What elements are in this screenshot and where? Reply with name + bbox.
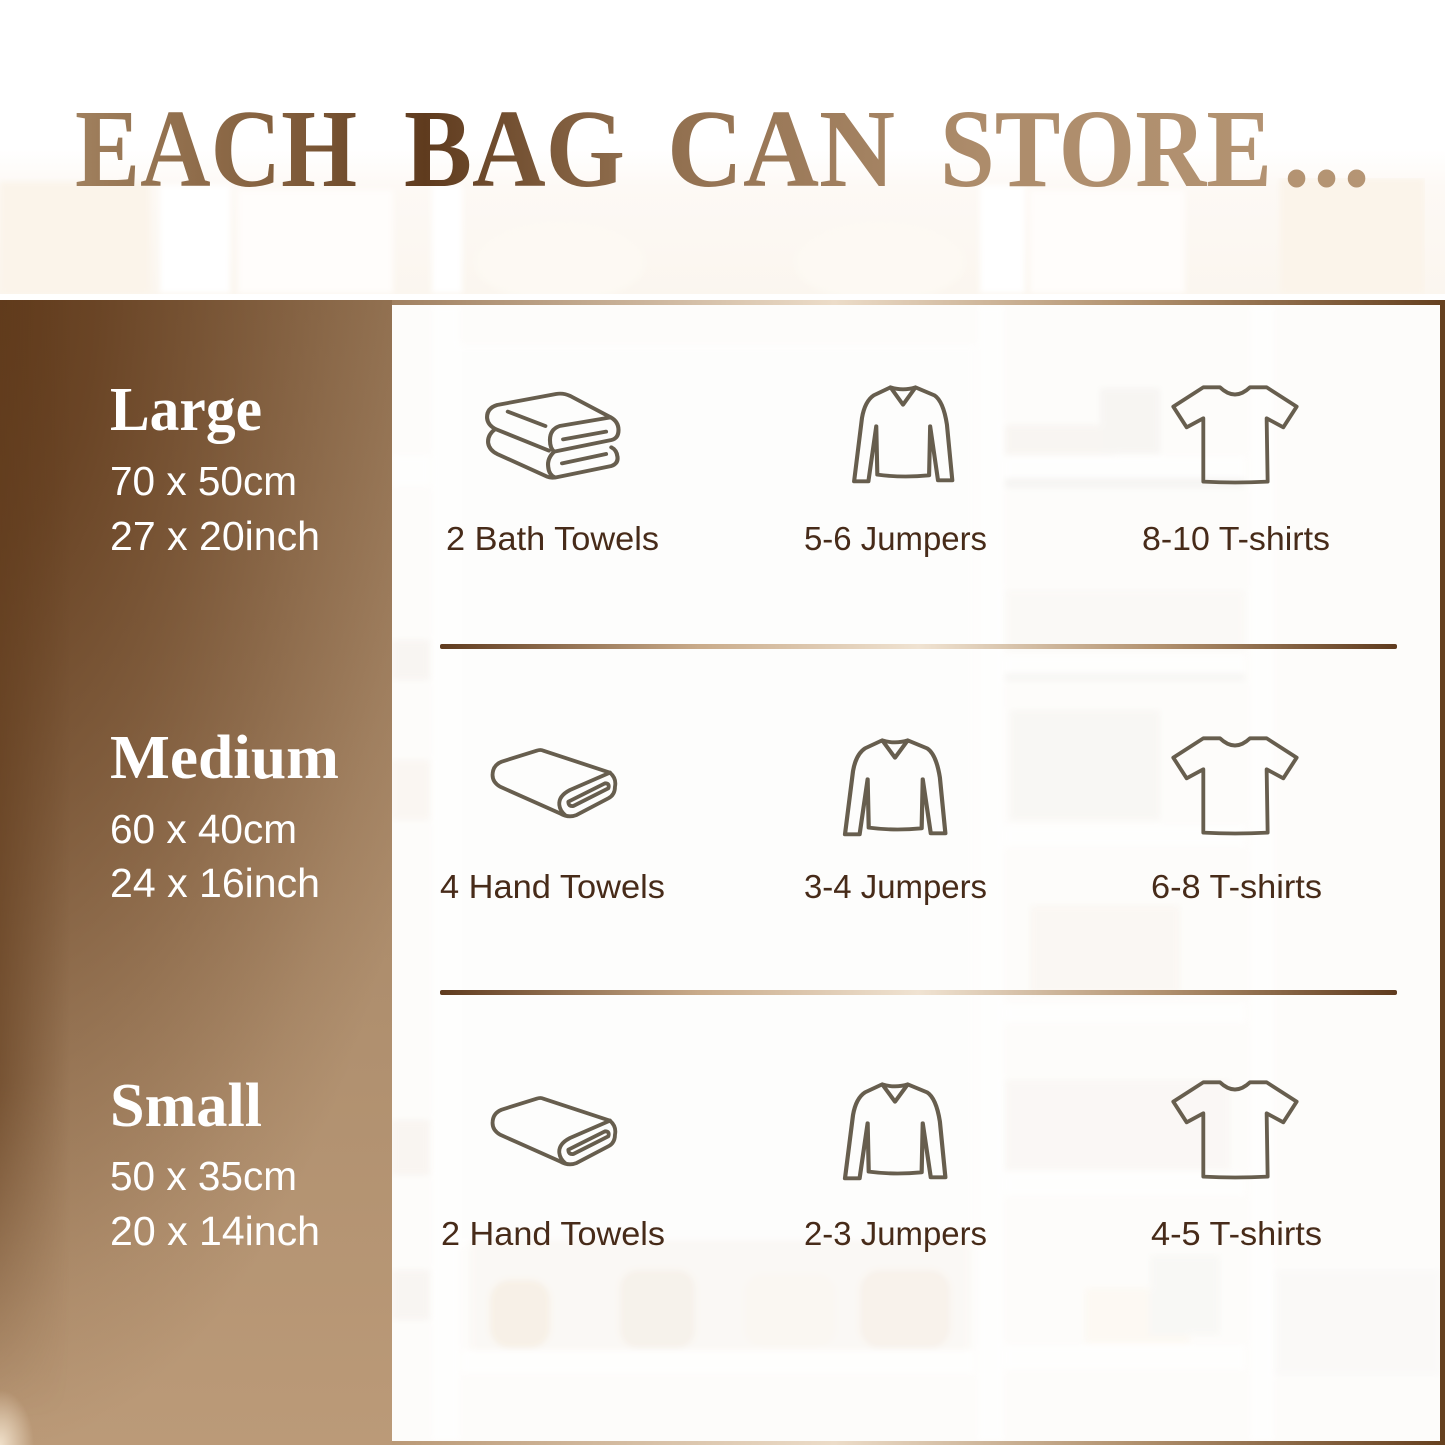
dimensions in cm: 60 x 40cm	[110, 806, 297, 852]
icon: t-shirt, large	[1173, 387, 1297, 482]
icon: t-shirt, medium	[1173, 738, 1297, 833]
dimensions in cm: 50 x 35cm	[110, 1153, 297, 1199]
label: 5-6 Jumpers: 5-6 Jumpers	[804, 520, 987, 557]
dimensions in inches: 27 x 20inch	[110, 513, 320, 559]
icon: jumper, small	[845, 1084, 945, 1178]
icon: jumper, large	[854, 387, 952, 481]
frame top edge	[392, 300, 1445, 305]
label: 2 Hand Towels: 2 Hand Towels	[441, 1215, 665, 1252]
label: 6-8 T-shirts: 6-8 T-shirts	[1151, 868, 1322, 905]
label: 8-10 T-shirts: 8-10 T-shirts	[1142, 520, 1330, 557]
label: 4 Hand Towels: 4 Hand Towels	[440, 868, 665, 905]
icon: folded hand towel, small	[493, 1098, 615, 1164]
dimensions in inches: 20 x 14inch	[110, 1208, 320, 1254]
dimensions in inches: 24 x 16inch	[110, 860, 320, 906]
heading: Medium: Medium	[110, 724, 339, 792]
icon: jumper, medium	[845, 740, 945, 834]
background: faded wardrobe shelves behind the table	[392, 305, 1440, 1441]
heading: Small: Small	[110, 1072, 262, 1140]
icon: folded hand towel, medium	[493, 750, 615, 816]
frame right edge	[1440, 300, 1445, 1445]
label: 3-4 Jumpers: 3-4 Jumpers	[804, 868, 987, 905]
label: 4-5 T-shirts: 4-5 T-shirts	[1151, 1215, 1322, 1252]
title: BAG	[404, 88, 625, 211]
size: large	[110, 376, 320, 559]
title: CAN	[667, 88, 895, 211]
label: 2-3 Jumpers: 2-3 Jumpers	[804, 1215, 987, 1252]
divider between medium and small	[440, 990, 1397, 995]
divider between large and medium	[440, 644, 1397, 649]
icon: t-shirt, small	[1173, 1082, 1297, 1177]
heading: Large: Large	[110, 376, 262, 444]
title: ...	[1283, 88, 1373, 211]
title: EACH	[75, 88, 357, 211]
background: faded wardrobe behind the heading	[0, 0, 1445, 302]
title	[75, 88, 1373, 211]
dimensions in cm: 70 x 50cm	[110, 458, 297, 504]
label: 2 Bath Towels: 2 Bath Towels	[446, 520, 659, 557]
size: small	[110, 1072, 320, 1254]
size: medium	[110, 724, 339, 906]
left sizes panel	[0, 300, 392, 1445]
icon: folded bath towels	[487, 394, 618, 478]
title: STORE	[940, 88, 1272, 211]
frame bottom edge	[392, 1441, 1445, 1445]
